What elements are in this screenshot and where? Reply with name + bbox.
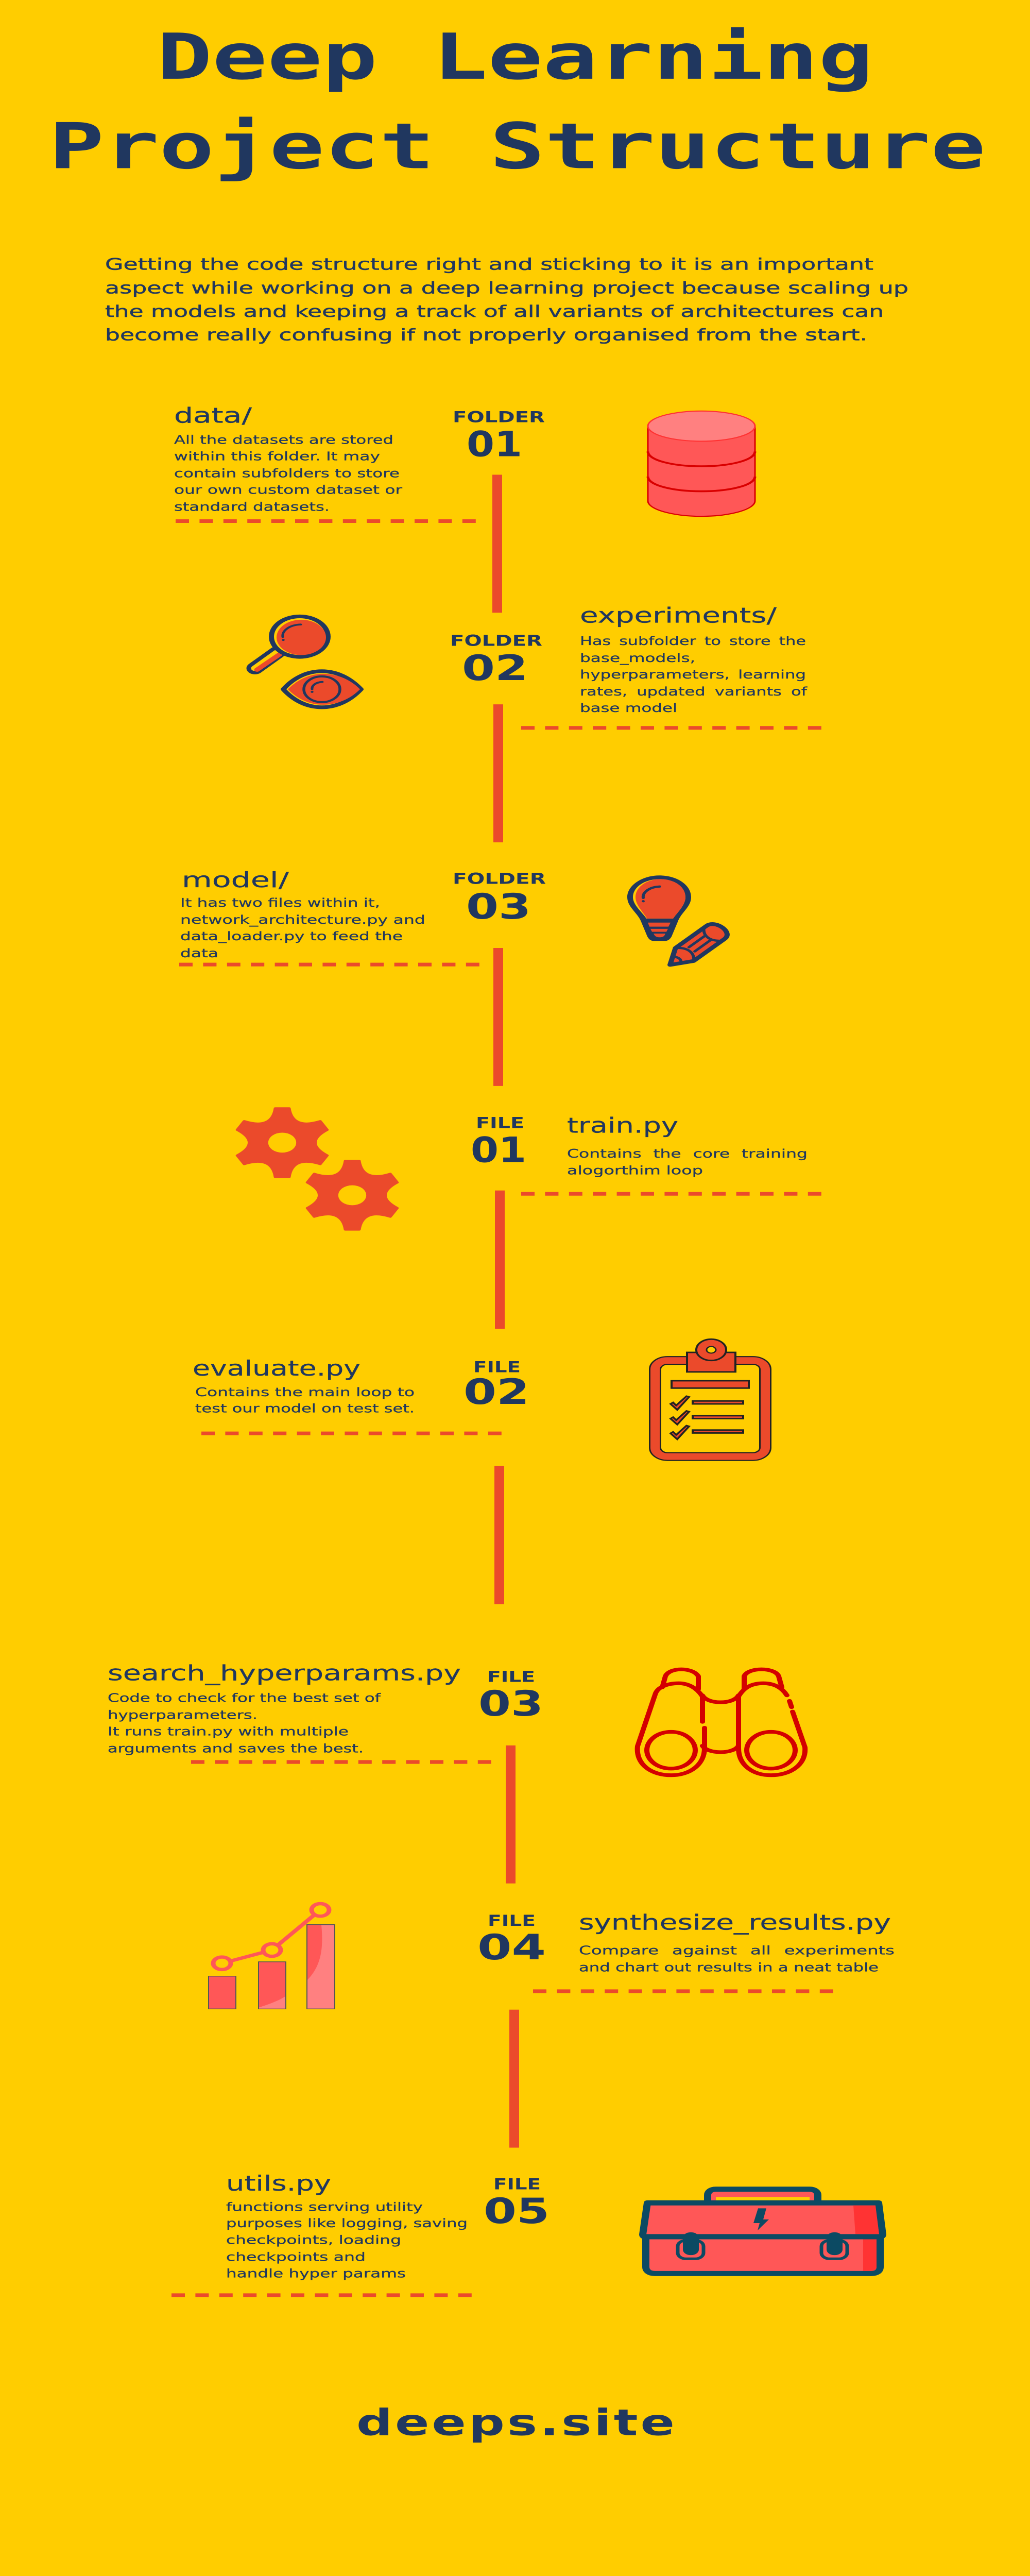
connector: 02 to 03 (493, 704, 503, 842)
description: synthesize_results.py: Compare against all experiments (579, 1943, 895, 1957)
icon: database (648, 411, 755, 516)
heading: train.py: train.py (567, 1113, 678, 1138)
intro paragraph: the models and keeping a track of all variants of architectures can (105, 302, 884, 320)
connector: file 01 to 02 (495, 1191, 505, 1329)
description: experiments: hyperparameters, learning (580, 668, 806, 682)
heading: model/: model/ (182, 868, 289, 892)
panel: utils.py (171, 2171, 883, 2295)
panel: search_hyperparams.py (108, 1661, 805, 1775)
description: utils.py: checkpoints and (226, 2250, 366, 2264)
description: train.py (567, 1147, 808, 1177)
description: search_hyperparams.py: It runs train.py with multiple (108, 1724, 349, 1738)
description: evaluate.py: Contains the main loop to (195, 1385, 415, 1399)
description: model: data (180, 946, 218, 960)
title (49, 20, 986, 183)
label: folder 02 (450, 632, 542, 688)
description: utils.py (226, 2200, 468, 2280)
label: folder 02: FOLDER (450, 632, 542, 650)
description: data: our own custom dataset or (174, 483, 403, 497)
label: folder 03: FOLDER (453, 870, 546, 888)
description: synthesize_results.py (579, 1943, 895, 1974)
description: experiments: base_models, (580, 651, 695, 665)
heading: experiments/: experiments/ (580, 603, 777, 628)
description: experiments: Has subfolder to store the (580, 634, 806, 648)
label: file 01: 01 (471, 1130, 526, 1171)
icon: growth bar chart (209, 1904, 335, 2009)
intro paragraph: aspect while working on a deep learning project because scaling up (105, 279, 908, 297)
icon: light bulb and pencil (627, 875, 731, 971)
title: Project Structure (49, 110, 986, 183)
description: data: All the datasets are stored (174, 433, 393, 447)
description: model: network_architecture.py and (180, 912, 425, 927)
label: file 04: FILE (488, 1912, 536, 1929)
label: file 01 (471, 1114, 526, 1171)
heading: evaluate.py: evaluate.py (193, 1356, 360, 1381)
panel: model folder (179, 868, 731, 971)
description: utils.py: purposes like logging, saving (226, 2216, 468, 2230)
description: model: It has two files within it, (180, 896, 380, 910)
description: data: within this folder. It may (174, 449, 380, 463)
heading: search_hyperparams.py: search_hyperparams.py (108, 1661, 461, 1685)
label: folder 03: 03 (466, 886, 531, 927)
description: model (180, 896, 425, 960)
icon: binoculars (638, 1669, 805, 1775)
description: data: standard datasets. (174, 500, 330, 514)
icon: gears (237, 1108, 397, 1230)
description: evaluate.py (195, 1385, 415, 1415)
description: model: data_loader.py to feed the (180, 929, 403, 943)
description: data: contain subfolders to store (174, 466, 400, 480)
footer: deeps.site: deeps.site (356, 2402, 675, 2444)
label: file 03: 03 (478, 1684, 543, 1724)
label: file 01: FILE (476, 1114, 524, 1132)
label: folder 01 (453, 409, 545, 465)
heading: utils.py: utils.py (226, 2171, 331, 2196)
title: Deep Learning (157, 20, 873, 94)
panel: experiments folder (255, 603, 821, 728)
description: experiments: base model (580, 701, 677, 715)
label: folder 03 (453, 870, 546, 927)
label: file 04: 04 (477, 1927, 546, 1968)
label: file 05: FILE (493, 2176, 541, 2193)
description: search_hyperparams.py (108, 1691, 381, 1755)
panel: synthesize_results.py (209, 1904, 895, 2009)
description: evaluate.py: test our model on test set. (195, 1401, 415, 1415)
label: folder 01: FOLDER (453, 409, 545, 426)
label: folder 02: 02 (462, 648, 528, 688)
icon: toolbox (643, 2189, 883, 2274)
intro paragraph: Getting the code structure right and sticking to it is an important (105, 255, 873, 274)
description: search_hyperparams.py: arguments and saves the best. (108, 1741, 364, 1755)
description: train.py: alogorthim loop (567, 1163, 703, 1177)
label: file 02: FILE (473, 1359, 521, 1376)
description: synthesize_results.py: and chart out results in a neat table (579, 1960, 879, 1974)
panel: data folder (174, 403, 755, 521)
connector: 01 to 02 (492, 474, 502, 613)
description: utils.py: checkpoints, loading (226, 2233, 401, 2247)
label: file 03: FILE (487, 1668, 535, 1686)
description: experiments (580, 634, 808, 715)
label: file 02: 02 (464, 1372, 529, 1412)
description: utils.py: functions serving utility (226, 2200, 423, 2214)
connector: file 02 to 03 (494, 1466, 504, 1604)
description: search_hyperparams.py: Code to check for the best set of (108, 1691, 381, 1705)
connector: file 03 to 04 (506, 1745, 516, 1884)
description: utils.py: handle hyper params (226, 2266, 406, 2280)
panel: train.py (237, 1108, 821, 1230)
icon: clipboard checklist (655, 1339, 765, 1456)
description: train.py: Contains the core training (567, 1147, 808, 1161)
intro paragraph: become really confusing if not properly organised from the start. (105, 326, 867, 344)
heading: data/: data/ (174, 403, 252, 428)
description: search_hyperparams.py: hyperparameters. (108, 1708, 258, 1722)
heading: synthesize_results.py: synthesize_results.py (579, 1910, 891, 1935)
description: data (174, 433, 403, 514)
intro paragraph (105, 255, 908, 344)
label: folder 01: 01 (467, 424, 522, 465)
label: file 05: 05 (484, 2191, 550, 2231)
description: experiments: rates, updated variants of (580, 685, 808, 699)
connector: 03 to file 01 (493, 948, 503, 1086)
panel: evaluate.py (193, 1339, 765, 1456)
icon: magnifier and eye (255, 616, 361, 707)
connector: file 04 to 05 (509, 2010, 519, 2148)
